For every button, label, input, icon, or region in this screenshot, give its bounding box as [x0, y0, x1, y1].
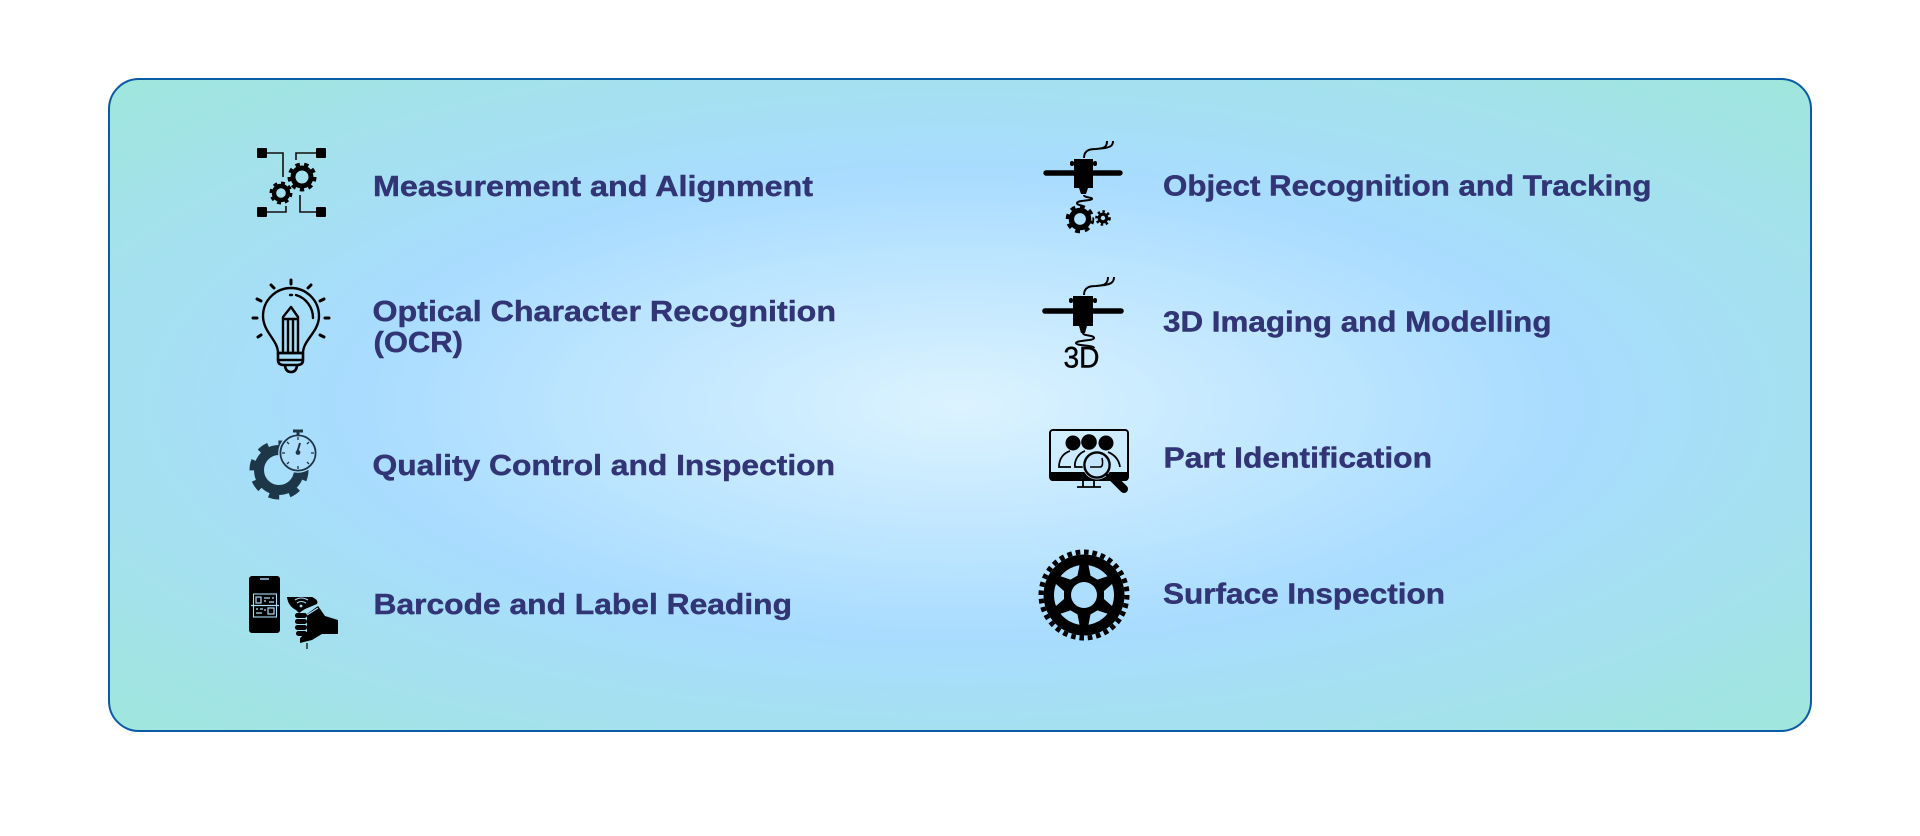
- item: Part Identification: [1050, 430, 1432, 489]
- icon: light bulb with pencil: [253, 280, 329, 372]
- item: Optical Character Recognition: [253, 280, 836, 372]
- label: Surface Inspection: [1163, 578, 1445, 610]
- item: Measurement and Alignment: [257, 148, 813, 217]
- icon: 3D printer head printing 3D: [1045, 277, 1121, 374]
- item: 3D Imaging and Modelling: [1045, 277, 1552, 374]
- panel: gradient background: [108, 78, 1812, 732]
- item: Object Recognition and Tracking: [1046, 141, 1652, 231]
- item: Quality Control and Inspection: [252, 431, 835, 496]
- icon: 3D printer head with gears: [1046, 141, 1120, 231]
- label: Object Recognition and Tracking: [1163, 170, 1652, 202]
- icon: phone QR code and hand scanner: [249, 576, 338, 649]
- label: Measurement and Alignment: [373, 171, 813, 203]
- label: second line: (OCR): [374, 327, 463, 359]
- item: Barcode and Label Reading: [249, 576, 792, 649]
- icon: gear with stopwatch: [252, 431, 318, 496]
- icon: sprocket wheel: [1041, 552, 1127, 638]
- label: 3D Imaging and Modelling: [1163, 306, 1552, 338]
- item: Surface Inspection: [1041, 552, 1445, 638]
- label: Optical Character Recognition: [372, 296, 836, 328]
- icon: gears with corner brackets: [257, 148, 326, 217]
- label: Barcode and Label Reading: [374, 589, 792, 621]
- icon: 3D printer head printing 3D: 3D: [1064, 342, 1100, 374]
- icon: monitor with magnifier over people: [1050, 430, 1128, 489]
- label: Quality Control and Inspection: [372, 450, 835, 482]
- label: Part Identification: [1164, 442, 1432, 474]
